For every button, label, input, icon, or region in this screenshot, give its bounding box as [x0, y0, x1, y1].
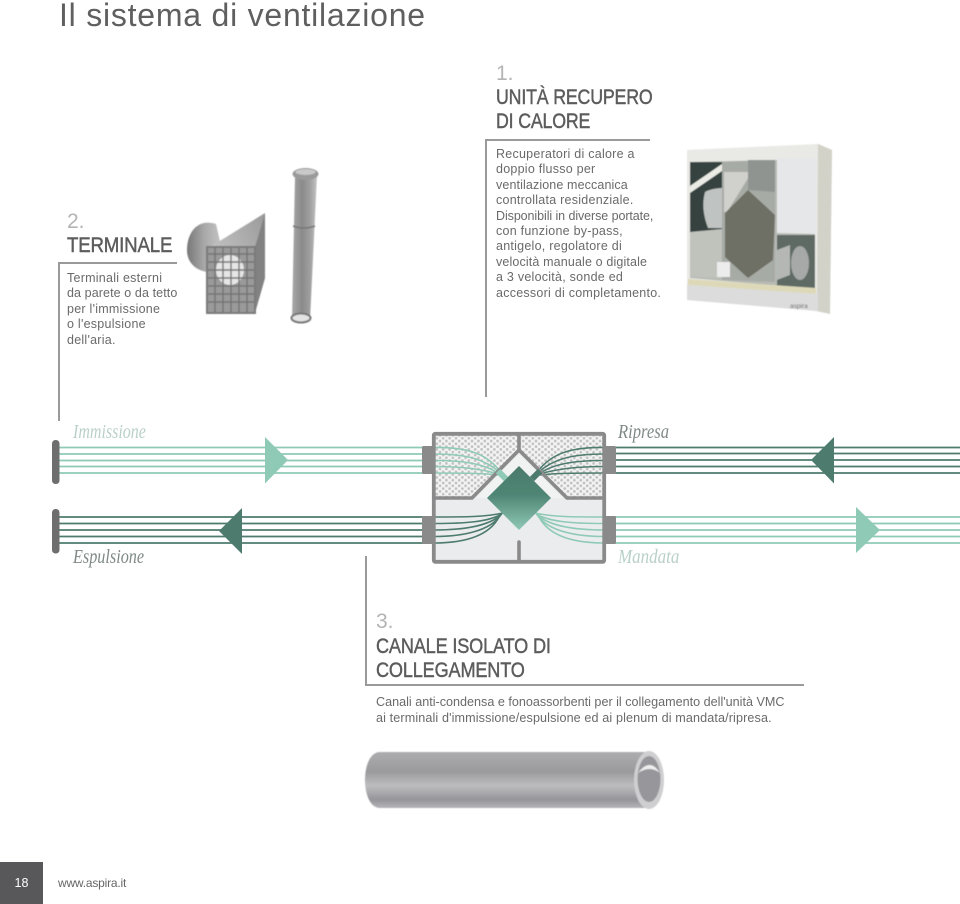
section 1 description: con funzione by-pass,	[496, 224, 623, 238]
page number box: 18	[15, 876, 28, 890]
arrow: mandata	[856, 507, 880, 553]
section 1 description: ventilazione meccanica	[496, 178, 628, 192]
section 1 description	[496, 147, 661, 300]
section 1 rule	[485, 139, 650, 141]
section 2 heading: TERMINALE	[67, 233, 172, 257]
section 3 description: Canali anti-condensa e fonoassorbenti per il collegamento dell'unità VMC	[376, 695, 784, 709]
section 3 heading: COLLEGAMENTO	[376, 658, 525, 682]
arrow: immissione	[265, 437, 288, 484]
heat recovery unit diagram	[422, 434, 616, 562]
website: www.aspira.it	[58, 876, 126, 890]
airflow: espulsione	[52, 508, 432, 554]
section 1 number: 1.	[496, 62, 514, 85]
bypass slots	[498, 471, 506, 479]
section 1 description: accessori di completamento.	[496, 286, 661, 300]
photo: roof terminal pipe	[292, 168, 318, 322]
flow curves bottom left	[434, 513, 503, 543]
photo: insulated duct	[365, 751, 664, 809]
section 1 heading: DI CALORE	[496, 109, 590, 133]
section 1 heading: UNITÀ RECUPERO	[496, 85, 653, 109]
section 2: terminale	[58, 210, 177, 421]
flow curves top right	[538, 447, 604, 475]
section 2 description: Terminali esterni	[67, 271, 162, 285]
label: Mandata: Mandata	[618, 546, 679, 568]
section 3 description: ai terminali d'immissione/espulsione ed ai plenum di mandata/ripresa.	[376, 711, 772, 725]
page number box	[0, 862, 43, 904]
section 3 number: 3.	[376, 610, 394, 633]
section 1 description: velocità manuale o digitale	[496, 255, 647, 269]
flow curves top left	[434, 447, 500, 475]
ports	[422, 446, 435, 474]
flow curves bottom right	[535, 513, 604, 543]
section 3 heading: CANALE ISOLATO DI	[376, 634, 551, 658]
exchanger diamond	[487, 466, 551, 530]
photo: wall terminal	[187, 213, 265, 313]
arrow: espulsione	[219, 508, 242, 554]
airflow: immissione	[52, 437, 432, 484]
section 2 rule	[58, 262, 177, 264]
arrow: ripresa	[811, 437, 834, 484]
section 2 description: o l'espulsione	[67, 317, 146, 331]
photo: heat recovery unit: aspira	[790, 303, 808, 310]
photo: heat recovery unit	[687, 144, 832, 314]
section 2 description: dell'aria.	[67, 333, 116, 347]
duct frame	[434, 450, 604, 498]
label: Immissione: Immissione	[73, 421, 146, 443]
section 1 description: Disponibili in diverse portate,	[496, 209, 653, 223]
filter zones	[434, 434, 604, 498]
section 1 description: antigelo, regolatore di	[496, 239, 622, 253]
section 3 description	[376, 695, 784, 725]
section 2 description: da parete o da tetto	[67, 286, 177, 300]
section 2 number: 2.	[67, 210, 85, 233]
section 1 description: doppio flusso per	[496, 162, 595, 176]
label: Espulsione: Espulsione	[73, 546, 144, 568]
section 3 rule	[365, 684, 804, 686]
airflow: ripresa	[606, 437, 960, 484]
section 1 heading	[496, 85, 653, 133]
section 1: unita recupero di calore	[485, 62, 661, 397]
section 3: canale isolato	[365, 556, 804, 725]
section 1 description: controllata residenziale.	[496, 193, 634, 207]
section 1 description: Recuperatori di calore a	[496, 147, 635, 161]
bar: espulsione end cap	[52, 509, 60, 554]
section 2 description	[67, 271, 177, 347]
airflow: mandata	[606, 507, 960, 553]
section 3 heading	[376, 634, 551, 682]
bar: immissione end cap	[52, 440, 60, 484]
section 2 description: per l'immissione	[67, 302, 160, 316]
footer	[0, 862, 126, 904]
section 1 description: a 3 velocità, sonde ed	[496, 270, 623, 284]
label: Ripresa: Ripresa	[618, 421, 669, 443]
outer casing	[434, 434, 604, 562]
